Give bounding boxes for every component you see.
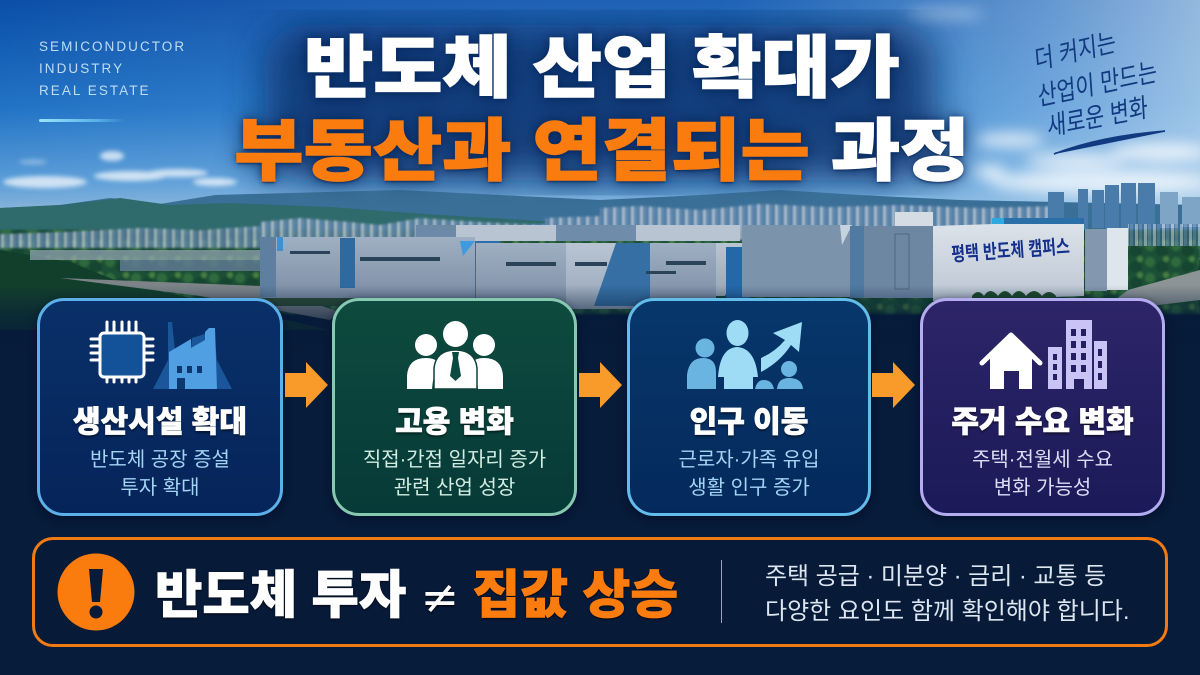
card heading: 주거 수요 변화: [951, 406, 1134, 439]
panel: employment change: [332, 298, 577, 516]
card description: [363, 449, 546, 499]
tagline: semiconductor industry real estate: SEMICONDUCTOR: [39, 39, 186, 54]
handwritten note: 새로운 변화: [1047, 93, 1149, 142]
title shade: [265, 25, 935, 180]
handwritten note: 더 커지는: [1033, 27, 1117, 76]
callout headline: 반도체 투자 ≠ 집값 상승: [155, 566, 678, 625]
tagline: semiconductor industry real estate: INDUSTRY: [39, 61, 124, 76]
callout divider: [721, 560, 722, 623]
icon: house and buildings: [980, 320, 1107, 389]
handwritten note: 산업이 만드는: [1037, 57, 1158, 112]
title line 1: 반도체 산업 확대가: [304, 30, 900, 106]
card description: [90, 449, 230, 499]
tagline: semiconductor industry real estate: REAL ESTATE: [39, 83, 151, 98]
title line 2: 부동산과 연결되는 과정: [234, 113, 970, 189]
card heading: 인구 이동: [690, 406, 808, 439]
callout: semiconductor investment is not house price rise: [32, 537, 1168, 647]
campus building: [250, 212, 1128, 309]
tagline: semiconductor industry real estate: [39, 39, 186, 98]
card description: 반도체 공장 증설: [90, 449, 230, 471]
arrow 2: [579, 362, 622, 408]
arrow 1: [285, 362, 328, 408]
icon: warning circle: [58, 554, 134, 630]
callout note: 다양한 요인도 함께 확인해야 합니다.: [765, 598, 1130, 625]
icon: three people with tie: [407, 321, 503, 389]
icon: family with rising arrow: [687, 320, 803, 389]
panel: housing demand change: [920, 298, 1165, 516]
card heading: 생산시설 확대: [73, 406, 247, 439]
campus sign: 평택 반도체 캠퍼스: [951, 235, 1070, 266]
icon: chip and factory: [90, 320, 232, 389]
card description: 직접·간접 일자리 증가: [363, 449, 546, 471]
card description: [972, 449, 1113, 499]
tagline underline: [39, 119, 125, 122]
card description: [678, 449, 820, 499]
panel: production facility expansion: [37, 298, 283, 516]
callout note: 주택 공급 · 미분양 · 금리 · 교통 등: [765, 563, 1106, 590]
card description: 주택·전월세 수요: [972, 449, 1113, 471]
card description: 생활 인구 증가: [688, 477, 810, 499]
card description: 투자 확대: [120, 477, 200, 499]
arrow 3: [872, 362, 915, 408]
card description: 근로자·가족 유입: [678, 449, 820, 471]
callout note: [765, 563, 1130, 625]
panel: population movement: [627, 298, 871, 516]
card heading: 고용 변화: [395, 406, 514, 439]
handwritten note: [1033, 27, 1166, 155]
card description: 관련 산업 성장: [394, 477, 515, 499]
card description: 변화 가능성: [994, 477, 1091, 499]
